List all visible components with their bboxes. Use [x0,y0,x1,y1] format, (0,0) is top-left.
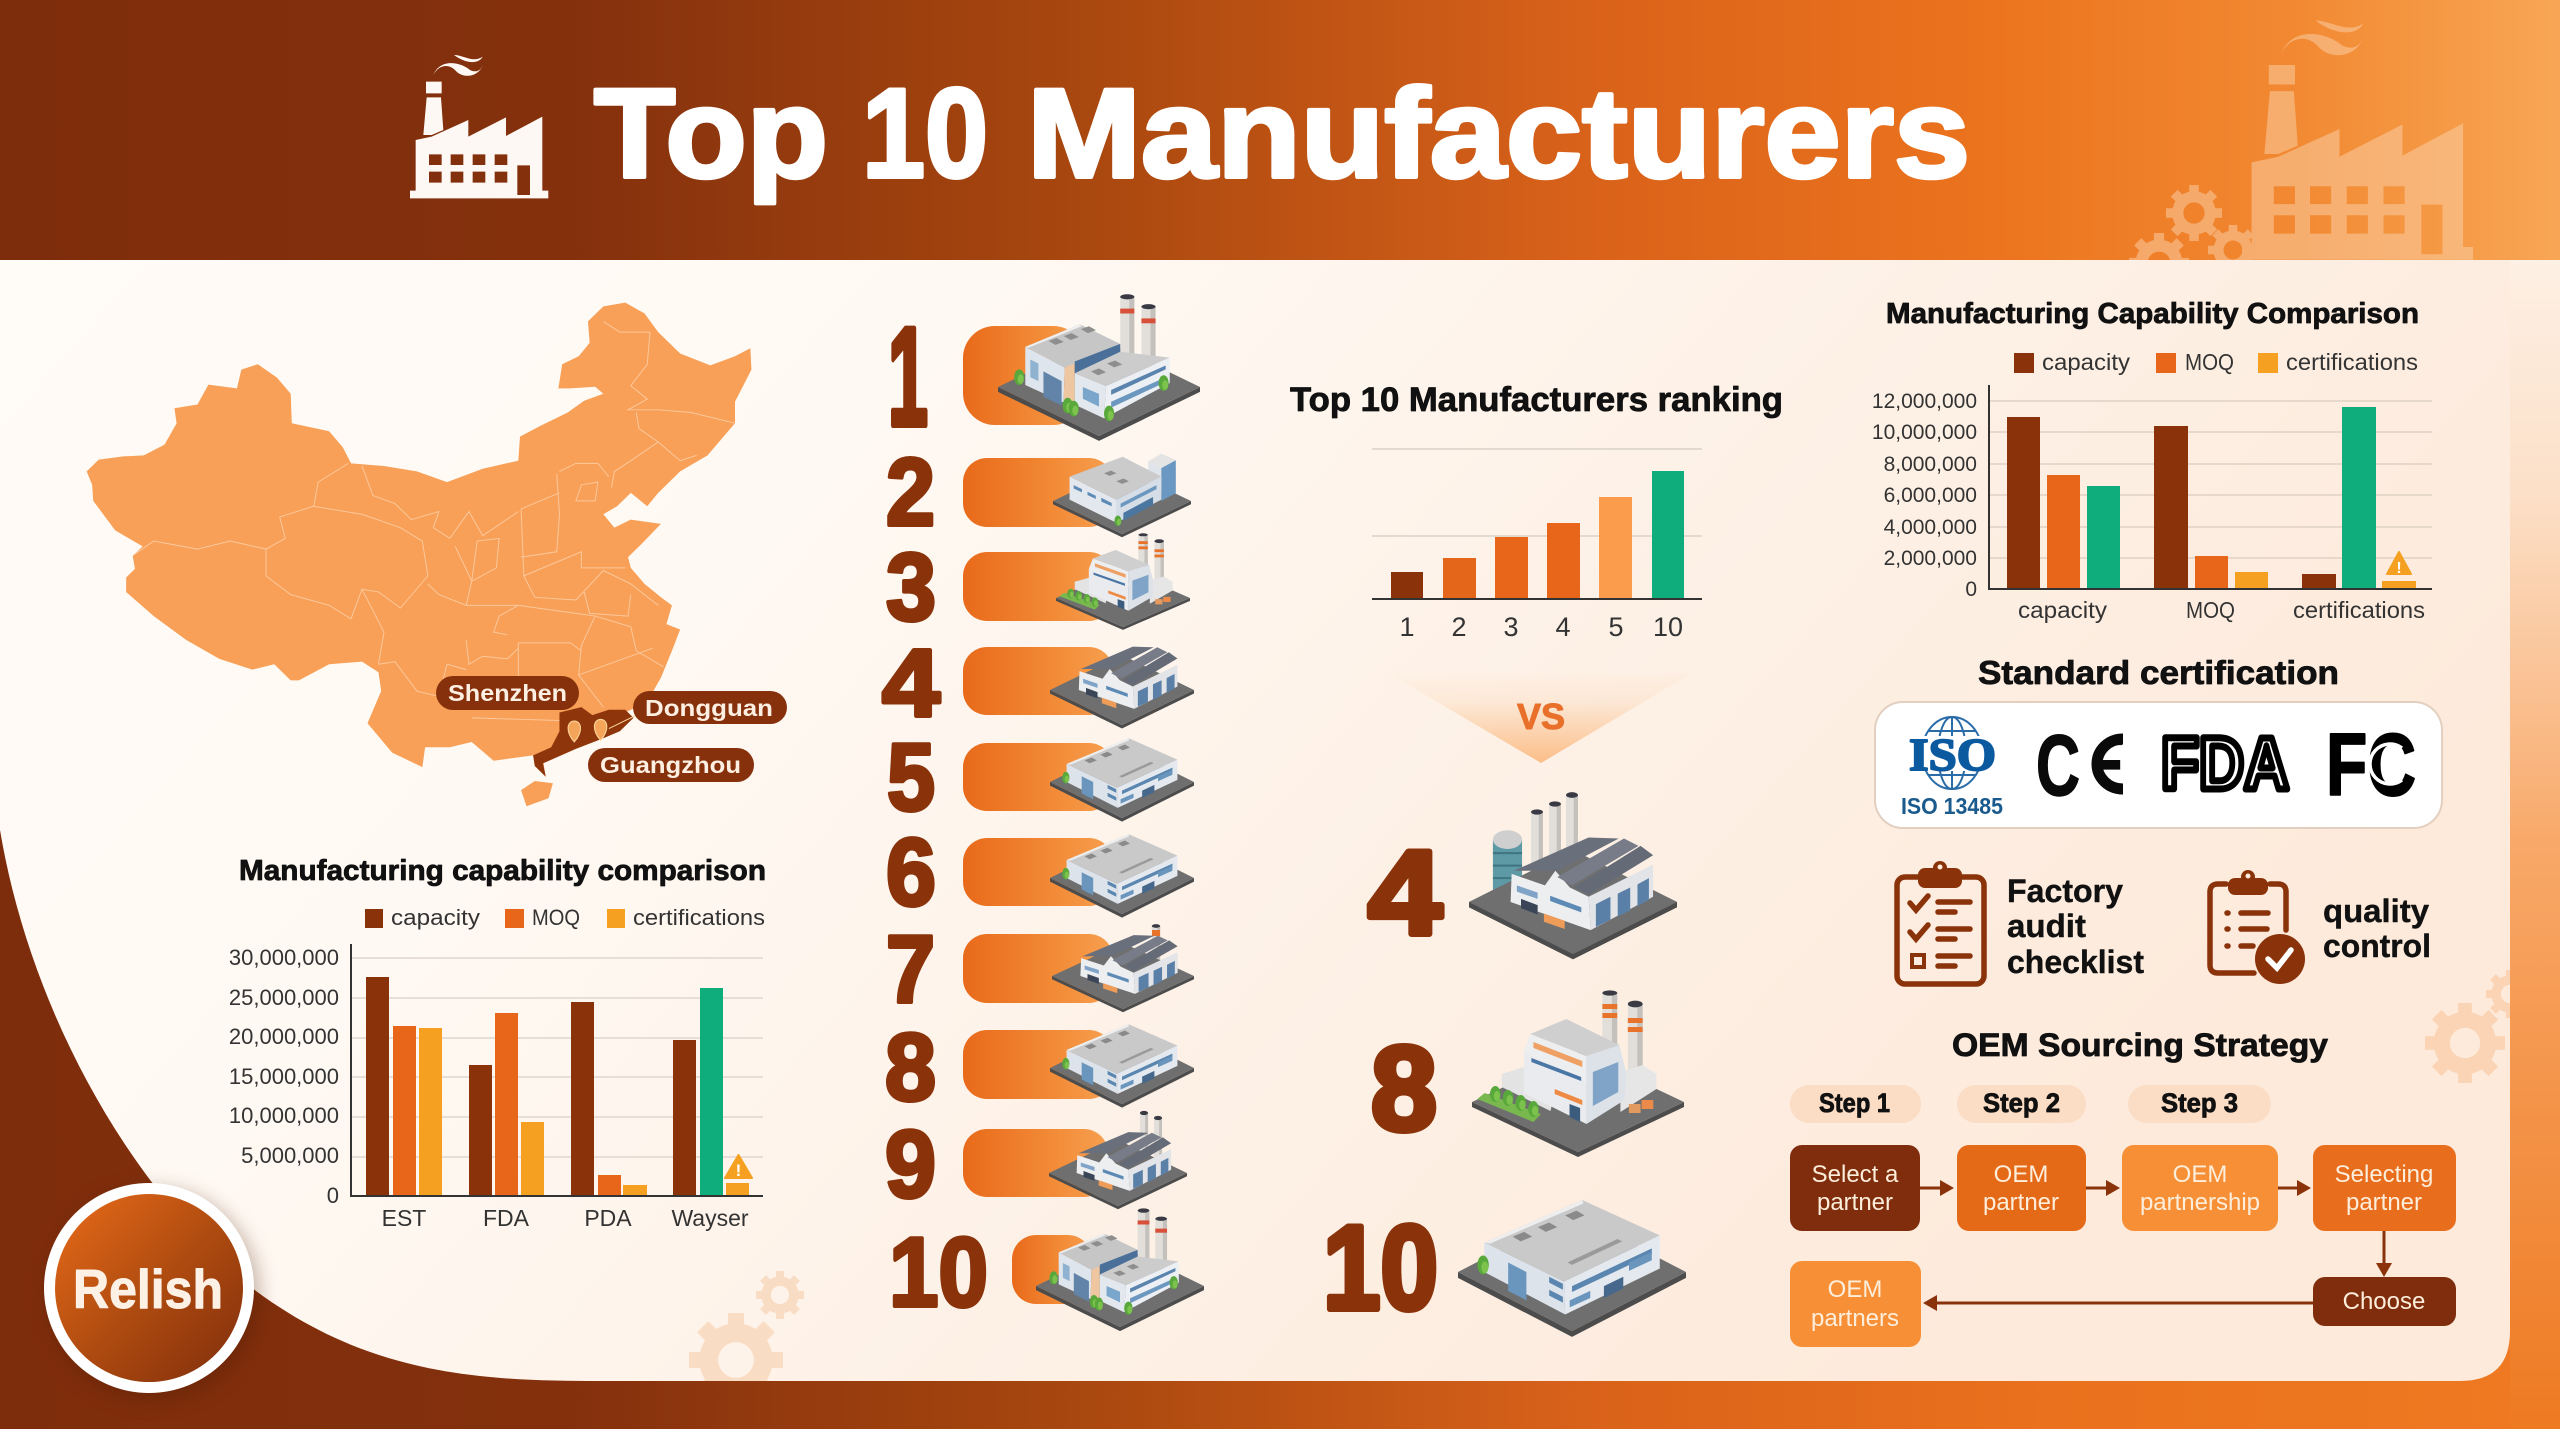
bar chart: 8,000,000 [1884,453,1977,476]
box: OEM partners: OEM [1828,1276,1882,1303]
logo: ISO 13485: ISO [1909,729,1996,780]
logo: ISO 13485: ISO 13485 [1901,793,2003,819]
icon: bottom-left gears [689,1271,804,1381]
text: factory audit checklist: audit [2007,908,2086,944]
panel: lower-left capability chart [229,855,766,1231]
panel: main content background [0,260,2510,1381]
comparison: manufacturer 10 [1323,1200,1686,1337]
ranking row 5: 5 [887,724,935,831]
ranking row 2: 2 [886,439,935,546]
bar chart: MOQ [2186,597,2235,623]
step pills: Step 1 [1819,1088,1890,1118]
bar chart: 3 [1503,612,1519,642]
heading: Manufacturing Capability Comparison [1886,298,2419,330]
ranking row 9 [885,1111,1187,1218]
logo: CE: C [2036,718,2080,814]
bar chart: 15,000,000 [229,1064,339,1089]
box: OEM partner [1957,1145,2086,1231]
icon: quality control clipboard [2210,870,2305,984]
heading: Manufacturing capability comparison [239,855,766,887]
box: OEM partnership: OEM [2173,1161,2227,1188]
ranking row 10: 10 [889,1217,988,1327]
bar chart: 20,000,000 [229,1024,339,1049]
ranking row 7 [886,916,1194,1023]
text: factory audit checklist: Factory [2007,873,2123,909]
panel: certification logos [1875,702,2442,828]
logo badge: Relish [44,1183,254,1393]
bar chart: 6,000,000 [1884,484,1977,507]
logo: FC: FC [2326,715,2416,814]
step pills: Step 3 [2161,1088,2238,1118]
box: Select a partner [1790,1145,1920,1231]
label: Guangzhou [588,748,754,782]
title: Manufacturers [1027,62,1970,204]
ranking row 6: 6 [886,819,936,926]
bar chart: ! [736,1161,741,1180]
ranking row 1 [888,294,1200,455]
ranking row 6 [886,819,1194,926]
heading: OEM Sourcing Strategy [1952,1027,2328,1063]
ranking row 5 [887,724,1194,831]
box: OEM partner: partner [1983,1189,2059,1216]
legend: MOQ [2185,349,2234,375]
bar chart [1372,449,1702,642]
legend: capacity [391,905,480,930]
title [594,62,1970,204]
bar chart: EST [382,1205,426,1231]
comparison: manufacturer 8 [1371,990,1684,1157]
bar chart: 25,000,000 [229,985,339,1010]
text: quality control [2323,893,2431,964]
bar chart: 5,000,000 [241,1143,339,1168]
legend [365,905,765,930]
heading: Standard certification: Standard certification [1978,654,2339,691]
bar chart: 1 [1399,612,1415,642]
step pills: Step 2 [1983,1088,2060,1118]
bar chart: 2,000,000 [1884,547,1977,570]
comparison: manufacturer 4 [1368,792,1677,960]
bar chart: PDA [584,1205,632,1231]
legend: MOQ [532,905,580,930]
header band [0,0,2560,260]
bar chart: FDA [483,1205,530,1231]
label: Shenzhen: Shenzhen [448,680,567,706]
label: Guangzhou: Guangzhou [600,752,741,778]
icon: white factory [410,55,548,198]
bar chart: 12,000,000 [1872,390,1977,413]
ranking row 9: 9 [885,1111,936,1218]
bar chart: Wayser [671,1205,749,1231]
comparison: manufacturer 4: 4 [1368,826,1442,960]
text: quality control: control [2323,928,2431,964]
icon: header watermark factory [2129,20,2473,260]
logo: ISO 13485 [1901,717,2003,819]
bar chart: 0 [1965,578,1977,601]
text: factory audit checklist: checklist [2007,944,2144,980]
callout: VS arrow [1383,670,1697,763]
box: OEM partners [1790,1261,1921,1347]
box: Choose [2313,1277,2456,1326]
arrows [1920,1180,2392,1311]
ranking row 7: 7 [886,916,935,1023]
bar chart: 4 [1555,612,1571,642]
bar chart: 10,000,000 [1872,421,1977,444]
bar chart: 5 [1608,612,1624,642]
box: Choose: Choose [2343,1288,2425,1315]
panel: top 10 ranking chart [1290,381,1783,642]
ranking row 8: 8 [885,1014,936,1121]
ranking row 10 [889,1208,1204,1331]
bar chart [1872,385,2432,623]
box: Selecting partner: Selecting [2335,1161,2433,1188]
box: OEM partnership [2122,1145,2278,1231]
label: Shenzhen [436,676,579,710]
panel: upper-right capability chart [1872,298,2432,623]
text: quality control: quality [2323,893,2429,929]
box: Selecting partner: partner [2346,1189,2422,1216]
box: OEM partnership: partnership [2140,1189,2260,1216]
bar chart: ! [2396,560,2402,577]
bar chart: 10,000,000 [229,1103,339,1128]
logo badge: Relish: Relish [73,1258,223,1320]
bar chart: 4,000,000 [1884,516,1977,539]
logo: CE: E [2089,718,2125,814]
callout: VS arrow: VS [1517,696,1565,737]
text: factory audit checklist [2007,873,2144,980]
bar chart: capacity [2018,597,2108,623]
legend: certifications [2286,349,2418,375]
bar chart: 30,000,000 [229,945,339,970]
step pills [1790,1085,2271,1123]
bar chart: 2 [1451,612,1467,642]
ranking row 3: 3 [886,534,936,641]
title: 10 [862,62,988,204]
ranking row 4 [882,630,1194,737]
box: Selecting partner [2313,1145,2456,1231]
comparison: manufacturer 10: 10 [1323,1201,1438,1335]
box: OEM partner: OEM [1994,1161,2048,1188]
heading: Top 10 Manufacturers ranking [1290,381,1783,419]
ranking row 8 [885,1014,1194,1121]
legend: capacity [2042,349,2131,375]
box: OEM partners: partners [1811,1305,1899,1332]
ranking row 2 [886,439,1191,546]
box: Select a partner: partner [1817,1189,1893,1216]
ranking row 4: 4 [882,630,940,737]
logo: CE [2036,718,2125,814]
box: Select a partner: Select a [1812,1161,1899,1188]
label: Dongguan [633,691,787,724]
bar chart [229,944,763,1231]
icon: right gears [2425,970,2510,1083]
ranking row 1: 1 [888,298,928,455]
panel: OEM sourcing strategy [1790,1027,2456,1347]
title: Top [594,62,828,204]
bar chart: 10 [1653,612,1683,642]
bar chart: 0 [327,1183,339,1208]
legend [2014,349,2418,375]
map: China with Guangdong highlighted [87,303,751,806]
legend: certifications [633,905,765,930]
comparison: manufacturer 8: 8 [1371,1022,1437,1156]
logo: FDA: FDA [2161,722,2289,805]
label: Dongguan: Dongguan [645,695,773,721]
icon: factory audit clipboard [1897,861,1984,984]
ranking row 3 [886,533,1190,641]
bar chart: certifications [2293,597,2425,623]
